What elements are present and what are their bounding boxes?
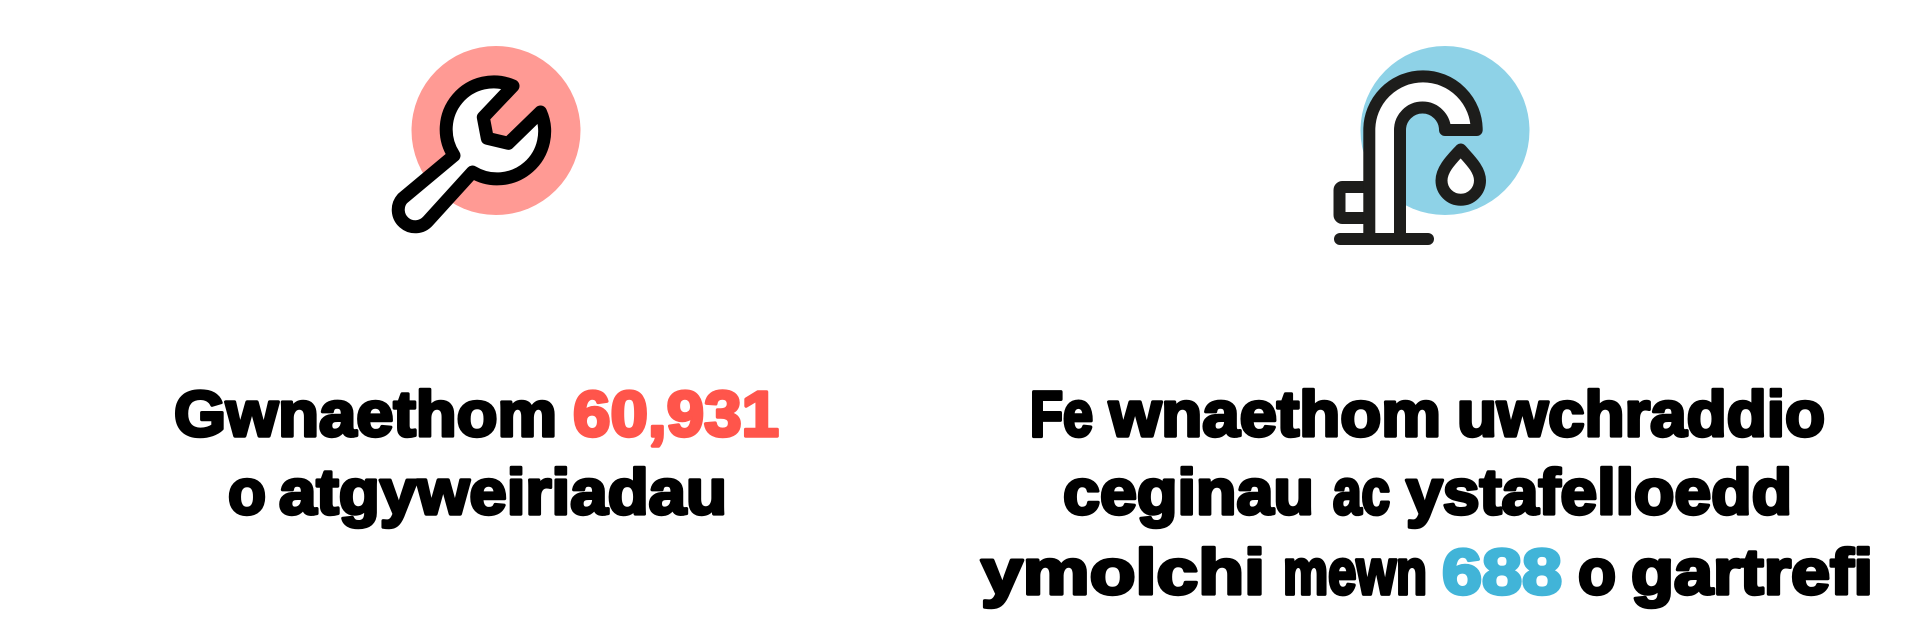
panel: repairs (174, 46, 779, 528)
text: upgrades statistic: mewn (1283, 536, 1427, 608)
text: repairs statistic: 60,931 (573, 378, 779, 450)
text: upgrades statistic (981, 378, 1873, 608)
text: upgrades statistic: wnaethom (1108, 378, 1441, 450)
text: upgrades statistic: 688 (1442, 536, 1562, 608)
text: repairs statistic: Gwnaethom (174, 378, 557, 450)
text: repairs statistic: o (228, 456, 266, 528)
text: upgrades statistic: Fe (1030, 378, 1093, 450)
icon: wrench on pink circle (398, 46, 580, 227)
text: upgrades statistic: ceginau (1063, 456, 1314, 528)
text: upgrades statistic: gartrefi (1631, 536, 1873, 608)
text: repairs statistic (174, 378, 779, 528)
icon: tap with water drop on blue circle (1340, 46, 1530, 239)
text: upgrades statistic: ystafelloedd (1406, 456, 1792, 528)
text: upgrades statistic: uwchraddio (1457, 378, 1825, 450)
text: upgrades statistic: ac (1333, 456, 1390, 528)
text: upgrades statistic: ymolchi (981, 536, 1265, 608)
text: upgrades statistic: o (1578, 536, 1616, 608)
panel: kitchens and bathrooms (981, 46, 1873, 608)
text: repairs statistic: atgyweiriadau (279, 456, 727, 528)
